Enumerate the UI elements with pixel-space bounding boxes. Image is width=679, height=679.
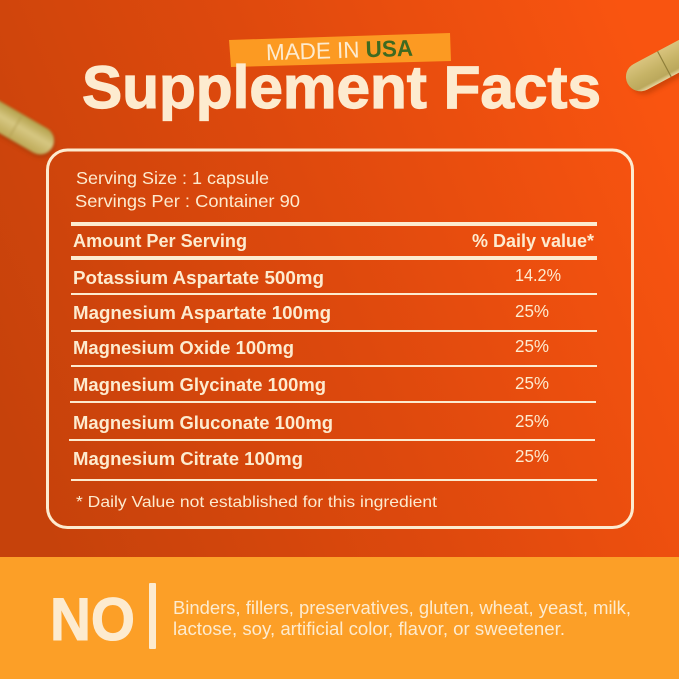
- row: magnesium gluconate: [73, 411, 549, 433]
- badge: made in USA: [229, 33, 451, 67]
- column header: daily value: % Daily value*: [472, 231, 594, 251]
- row: magnesium citrate: Magnesium Citrate 100mg: [73, 449, 303, 469]
- row: magnesium glycinate: [73, 373, 549, 395]
- icon: capsule right: [621, 13, 679, 100]
- serving size: Serving Size : 1 capsule: [76, 168, 269, 188]
- exclusions list: Binders, fillers, preservatives, gluten, wheat, yeast, milk,: [173, 597, 631, 618]
- exclusions list: [173, 597, 631, 639]
- row: magnesium oxide: Magnesium Oxide 100mg: [73, 338, 294, 358]
- divider bar: [149, 583, 156, 649]
- row: magnesium glycinate: 25%: [515, 373, 549, 393]
- bottom band: [0, 557, 679, 679]
- row: magnesium glycinate: Magnesium Glycinate 100mg: [73, 375, 326, 395]
- badge: made in USA: MADE IN USA: [266, 35, 413, 65]
- column header: amount per serving: Amount Per Serving: [73, 231, 247, 251]
- servings per container: Servings Per : Container 90: [75, 191, 300, 211]
- row: magnesium citrate: [73, 446, 549, 469]
- footnote: * Daily Value not established for this ingredient: [76, 494, 438, 511]
- NO heading: NO: [50, 586, 135, 653]
- row: magnesium oxide: [73, 336, 549, 358]
- exclusions list: lactose, soy, artificial color, flavor, or sweetener.: [173, 618, 565, 639]
- row: magnesium aspartate: 25%: [515, 301, 549, 321]
- row: magnesium aspartate: [73, 301, 549, 323]
- row: magnesium citrate: 25%: [515, 446, 549, 466]
- title: Supplement Facts: [82, 54, 601, 121]
- row: magnesium gluconate: 25%: [515, 411, 549, 431]
- panel: supplement facts table: [48, 150, 632, 528]
- row: potassium aspartate: [73, 265, 561, 288]
- row: magnesium aspartate: Magnesium Aspartate 100mg: [73, 303, 331, 323]
- row: potassium aspartate: Potassium Aspartate 500mg: [73, 268, 324, 288]
- row: potassium aspartate: 14.2%: [515, 265, 561, 285]
- row: magnesium gluconate: Magnesium Gluconate 100mg: [73, 413, 333, 433]
- row: magnesium oxide: 25%: [515, 336, 549, 356]
- icon: capsule left: [0, 74, 61, 162]
